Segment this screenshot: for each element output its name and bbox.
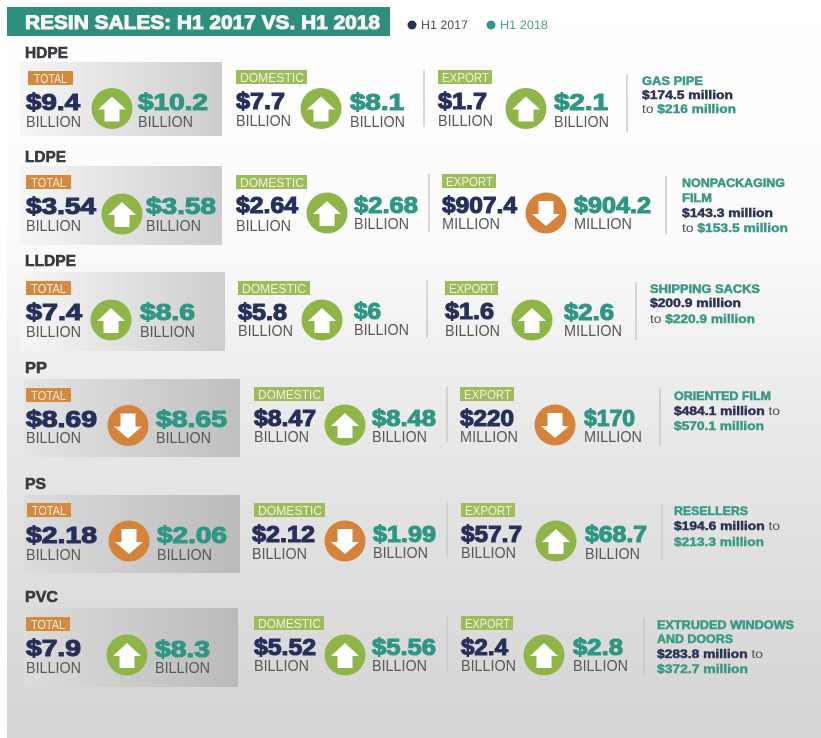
panel: LDPE total: $3.54	[26, 193, 96, 219]
end market: extruded windows and doors	[657, 618, 794, 676]
export: HDPE	[438, 70, 609, 131]
domestic: PP	[254, 387, 436, 446]
export: PS: $57.7	[461, 521, 522, 547]
export: PP: MILLION	[460, 429, 518, 446]
domestic: HDPE: $8.1	[350, 89, 404, 115]
export: PS	[461, 503, 647, 563]
domestic: PP: BILLION	[372, 429, 427, 446]
heading: LLDPE: LLDPE	[25, 253, 76, 270]
end market: resellers: RESELLERS	[674, 504, 748, 518]
panel: PVC total: TOTAL	[31, 617, 65, 632]
export: PP: $220	[460, 405, 514, 431]
export: HDPE: EXPORT	[442, 70, 489, 85]
export: LLDPE: MILLION	[564, 323, 622, 340]
panel: PP total: TOTAL	[31, 388, 66, 403]
domestic: PVC: $5.52	[254, 634, 316, 660]
domestic: PVC: $5.56	[372, 634, 436, 660]
icon: up arrow	[106, 634, 148, 676]
domestic: LDPE	[236, 175, 418, 235]
export: PVC: EXPORT	[465, 616, 510, 631]
domestic: LDPE: $2.64	[236, 192, 298, 218]
end market: nonpackaging film: FILM	[682, 191, 712, 205]
icon: up arrow	[90, 300, 132, 340]
domestic: PP: $8.48	[372, 405, 436, 431]
end market: oriented film	[674, 389, 780, 433]
icon: up arrow	[300, 88, 342, 129]
export: LDPE: MILLION	[442, 216, 500, 233]
panel: LLDPE total: BILLION	[140, 324, 195, 341]
domestic: LLDPE: $5.8	[238, 299, 287, 325]
panel: LDPE total: TOTAL	[31, 175, 66, 190]
end market: resellers	[674, 504, 780, 549]
panel: PS total: BILLION	[26, 547, 81, 564]
domestic: PS: $1.99	[373, 521, 436, 547]
domestic: HDPE	[236, 70, 405, 131]
panel: LLDPE total: TOTAL	[31, 281, 66, 296]
domestic: PP: BILLION	[254, 429, 309, 446]
icon: up arrow	[512, 300, 552, 340]
heading: HDPE: HDPE	[25, 45, 68, 62]
export: HDPE: BILLION	[438, 113, 493, 130]
domestic: PVC: BILLION	[254, 658, 309, 675]
end market: resellers: $213.3 million	[674, 535, 764, 549]
end market: shipping sacks	[650, 282, 760, 326]
domestic: LDPE: BILLION	[354, 216, 409, 233]
export: LLDPE: $2.6	[564, 299, 614, 325]
panel: PP total	[24, 379, 240, 457]
panel: PP total: BILLION	[26, 430, 81, 447]
end market: oriented film: ORIENTED FILM	[674, 389, 771, 403]
heading: PP: PP	[25, 360, 47, 377]
panel: LLDPE total: $8.6	[140, 299, 195, 325]
end market: shipping sacks: $200.9 million	[650, 296, 741, 310]
row: PS	[24, 476, 780, 573]
panel: PS total: $2.18	[26, 522, 97, 548]
export: LLDPE: $1.6	[445, 298, 494, 324]
export: PVC: $2.4	[461, 634, 508, 660]
panel: PS total: $2.06	[157, 522, 227, 548]
export: PVC: BILLION	[573, 658, 628, 675]
panel: LDPE total: BILLION	[26, 218, 81, 235]
panel: PVC total: $8.3	[155, 636, 210, 662]
title banner: RESIN SALES: H1 2017 VS. H1 2018	[25, 12, 380, 34]
end market: shipping sacks: to $220.9 million	[650, 312, 755, 326]
icon: down arrow	[534, 404, 576, 446]
panel: HDPE total: BILLION	[138, 114, 193, 131]
domestic: PS: DOMESTIC	[258, 503, 322, 518]
panel: LDPE total: BILLION	[146, 218, 201, 235]
end market: extruded windows and doors: AND DOORS	[657, 632, 733, 646]
export: LDPE: $904.2	[574, 192, 651, 218]
end market: extruded windows and doors: $283.8 million to	[657, 647, 763, 661]
panel: HDPE total: BILLION	[26, 114, 81, 131]
export: PS: BILLION	[461, 545, 516, 562]
domestic: PP: DOMESTIC	[258, 387, 321, 402]
panel: HDPE total: $9.4	[26, 89, 80, 115]
row: PVC	[24, 589, 794, 687]
heading: LDPE: LDPE	[25, 149, 66, 166]
export: PP: EXPORT	[464, 387, 511, 402]
domestic: PVC: DOMESTIC	[258, 616, 321, 631]
domestic: PVC	[254, 616, 436, 676]
end market: oriented film: $484.1 million to	[674, 404, 780, 418]
icon: up arrow	[302, 300, 342, 340]
end market: gas pipe: to $216 million	[642, 102, 736, 116]
panel: LLDPE total: $7.4	[26, 299, 82, 325]
icon: down arrow	[324, 520, 366, 562]
export: LLDPE: BILLION	[445, 323, 500, 340]
export: PVC: $2.8	[573, 634, 623, 660]
end market: nonpackaging film: $143.3 million	[682, 206, 773, 220]
export: HDPE: BILLION	[554, 114, 609, 131]
export: HDPE: $1.7	[438, 88, 487, 114]
end market: gas pipe: $174.5 million	[642, 88, 733, 102]
panel: PVC total: BILLION	[155, 660, 210, 677]
domestic: LLDPE	[238, 281, 409, 340]
domestic: LDPE: BILLION	[236, 218, 291, 235]
panel: PS total: BILLION	[157, 547, 212, 564]
icon: up arrow	[524, 634, 564, 676]
row: HDPE	[20, 45, 736, 136]
panel: PP total: $8.69	[26, 406, 97, 432]
export: PVC: BILLION	[461, 658, 516, 675]
export: PS: EXPORT	[465, 503, 512, 518]
export: PS: BILLION	[585, 546, 640, 563]
end market: nonpackaging film: to $153.5 million	[682, 221, 788, 235]
export: LDPE: EXPORT	[446, 174, 493, 189]
export: PP	[460, 387, 642, 446]
end market: gas pipe	[642, 74, 736, 116]
export: PP: $170	[584, 405, 635, 431]
domestic: HDPE: BILLION	[236, 113, 291, 130]
domestic: PS: BILLION	[373, 545, 428, 562]
legend: H1 2018	[500, 18, 548, 32]
domestic: LLDPE: $6	[354, 298, 381, 324]
end market: resellers: $194.6 million to	[674, 519, 780, 533]
panel: LDPE total	[20, 166, 222, 245]
icon: up arrow	[506, 88, 546, 129]
export: LDPE	[442, 174, 651, 234]
domestic: HDPE: $7.7	[236, 88, 285, 114]
export: LDPE: $907.4	[442, 192, 517, 218]
domestic: PVC: BILLION	[372, 658, 427, 675]
panel: HDPE total: $10.2	[138, 89, 208, 115]
panel: LLDPE total	[20, 272, 225, 351]
panel: PS total	[24, 495, 240, 573]
domestic: LLDPE: BILLION	[354, 322, 409, 339]
domestic: HDPE: BILLION	[350, 114, 405, 131]
domestic: LDPE: DOMESTIC	[240, 175, 304, 190]
panel: HDPE total	[20, 62, 222, 136]
end market: nonpackaging film: NONPACKAGING	[682, 176, 785, 190]
end market: oriented film: $570.1 million	[674, 419, 764, 433]
end market: extruded windows and doors: $372.7 million	[657, 662, 748, 676]
icon: down arrow	[108, 520, 150, 562]
icon: up arrow	[536, 520, 576, 562]
panel: PVC total: $7.9	[26, 635, 81, 661]
panel: PVC total	[24, 608, 238, 687]
domestic: LLDPE: BILLION	[238, 323, 293, 340]
panel: PVC total: BILLION	[26, 660, 81, 677]
panel: PP total: BILLION	[156, 430, 211, 447]
export: LLDPE: EXPORT	[449, 281, 495, 296]
export: LDPE: MILLION	[574, 216, 632, 233]
domestic: PP: $8.47	[254, 405, 316, 431]
panel: LDPE total: $3.58	[146, 193, 216, 219]
title banner	[7, 7, 390, 36]
row: PP	[24, 360, 780, 457]
domestic: LLDPE: DOMESTIC	[242, 281, 306, 296]
domestic: PS: BILLION	[252, 546, 307, 563]
domestic: PS	[252, 503, 436, 563]
row: LDPE	[20, 149, 788, 245]
domestic: LDPE: $2.68	[354, 192, 418, 218]
export: PVC	[461, 616, 628, 676]
end market: nonpackaging film	[682, 176, 788, 235]
row: LLDPE	[20, 253, 760, 351]
panel: PP total: $8.65	[156, 406, 227, 432]
panel: LLDPE total: BILLION	[26, 324, 81, 341]
end market: extruded windows and doors: EXTRUDED WINDOWS	[657, 618, 794, 632]
end market: shipping sacks: SHIPPING SACKS	[650, 282, 760, 296]
domestic: PS: $2.12	[252, 521, 315, 547]
panel: PS total: TOTAL	[32, 503, 66, 518]
icon: up arrow	[306, 192, 348, 234]
icon: up arrow	[324, 404, 366, 446]
icon: down arrow	[526, 192, 566, 234]
legend: H1 2017	[421, 18, 468, 32]
export: HDPE: $2.1	[554, 89, 608, 115]
icon: up arrow	[92, 88, 132, 129]
export: PS: $68.7	[585, 521, 647, 547]
heading: PS: PS	[25, 476, 46, 493]
icon: up arrow	[324, 634, 366, 676]
end market: gas pipe: GAS PIPE	[642, 74, 703, 88]
legend	[408, 18, 548, 32]
icon: up arrow	[102, 194, 142, 234]
domestic: HDPE: DOMESTIC	[240, 70, 304, 85]
export: PP: MILLION	[584, 429, 642, 446]
icon: down arrow	[108, 405, 148, 446]
panel: HDPE total: TOTAL	[34, 71, 67, 86]
heading: PVC: PVC	[25, 589, 58, 606]
export: LLDPE	[445, 281, 622, 340]
